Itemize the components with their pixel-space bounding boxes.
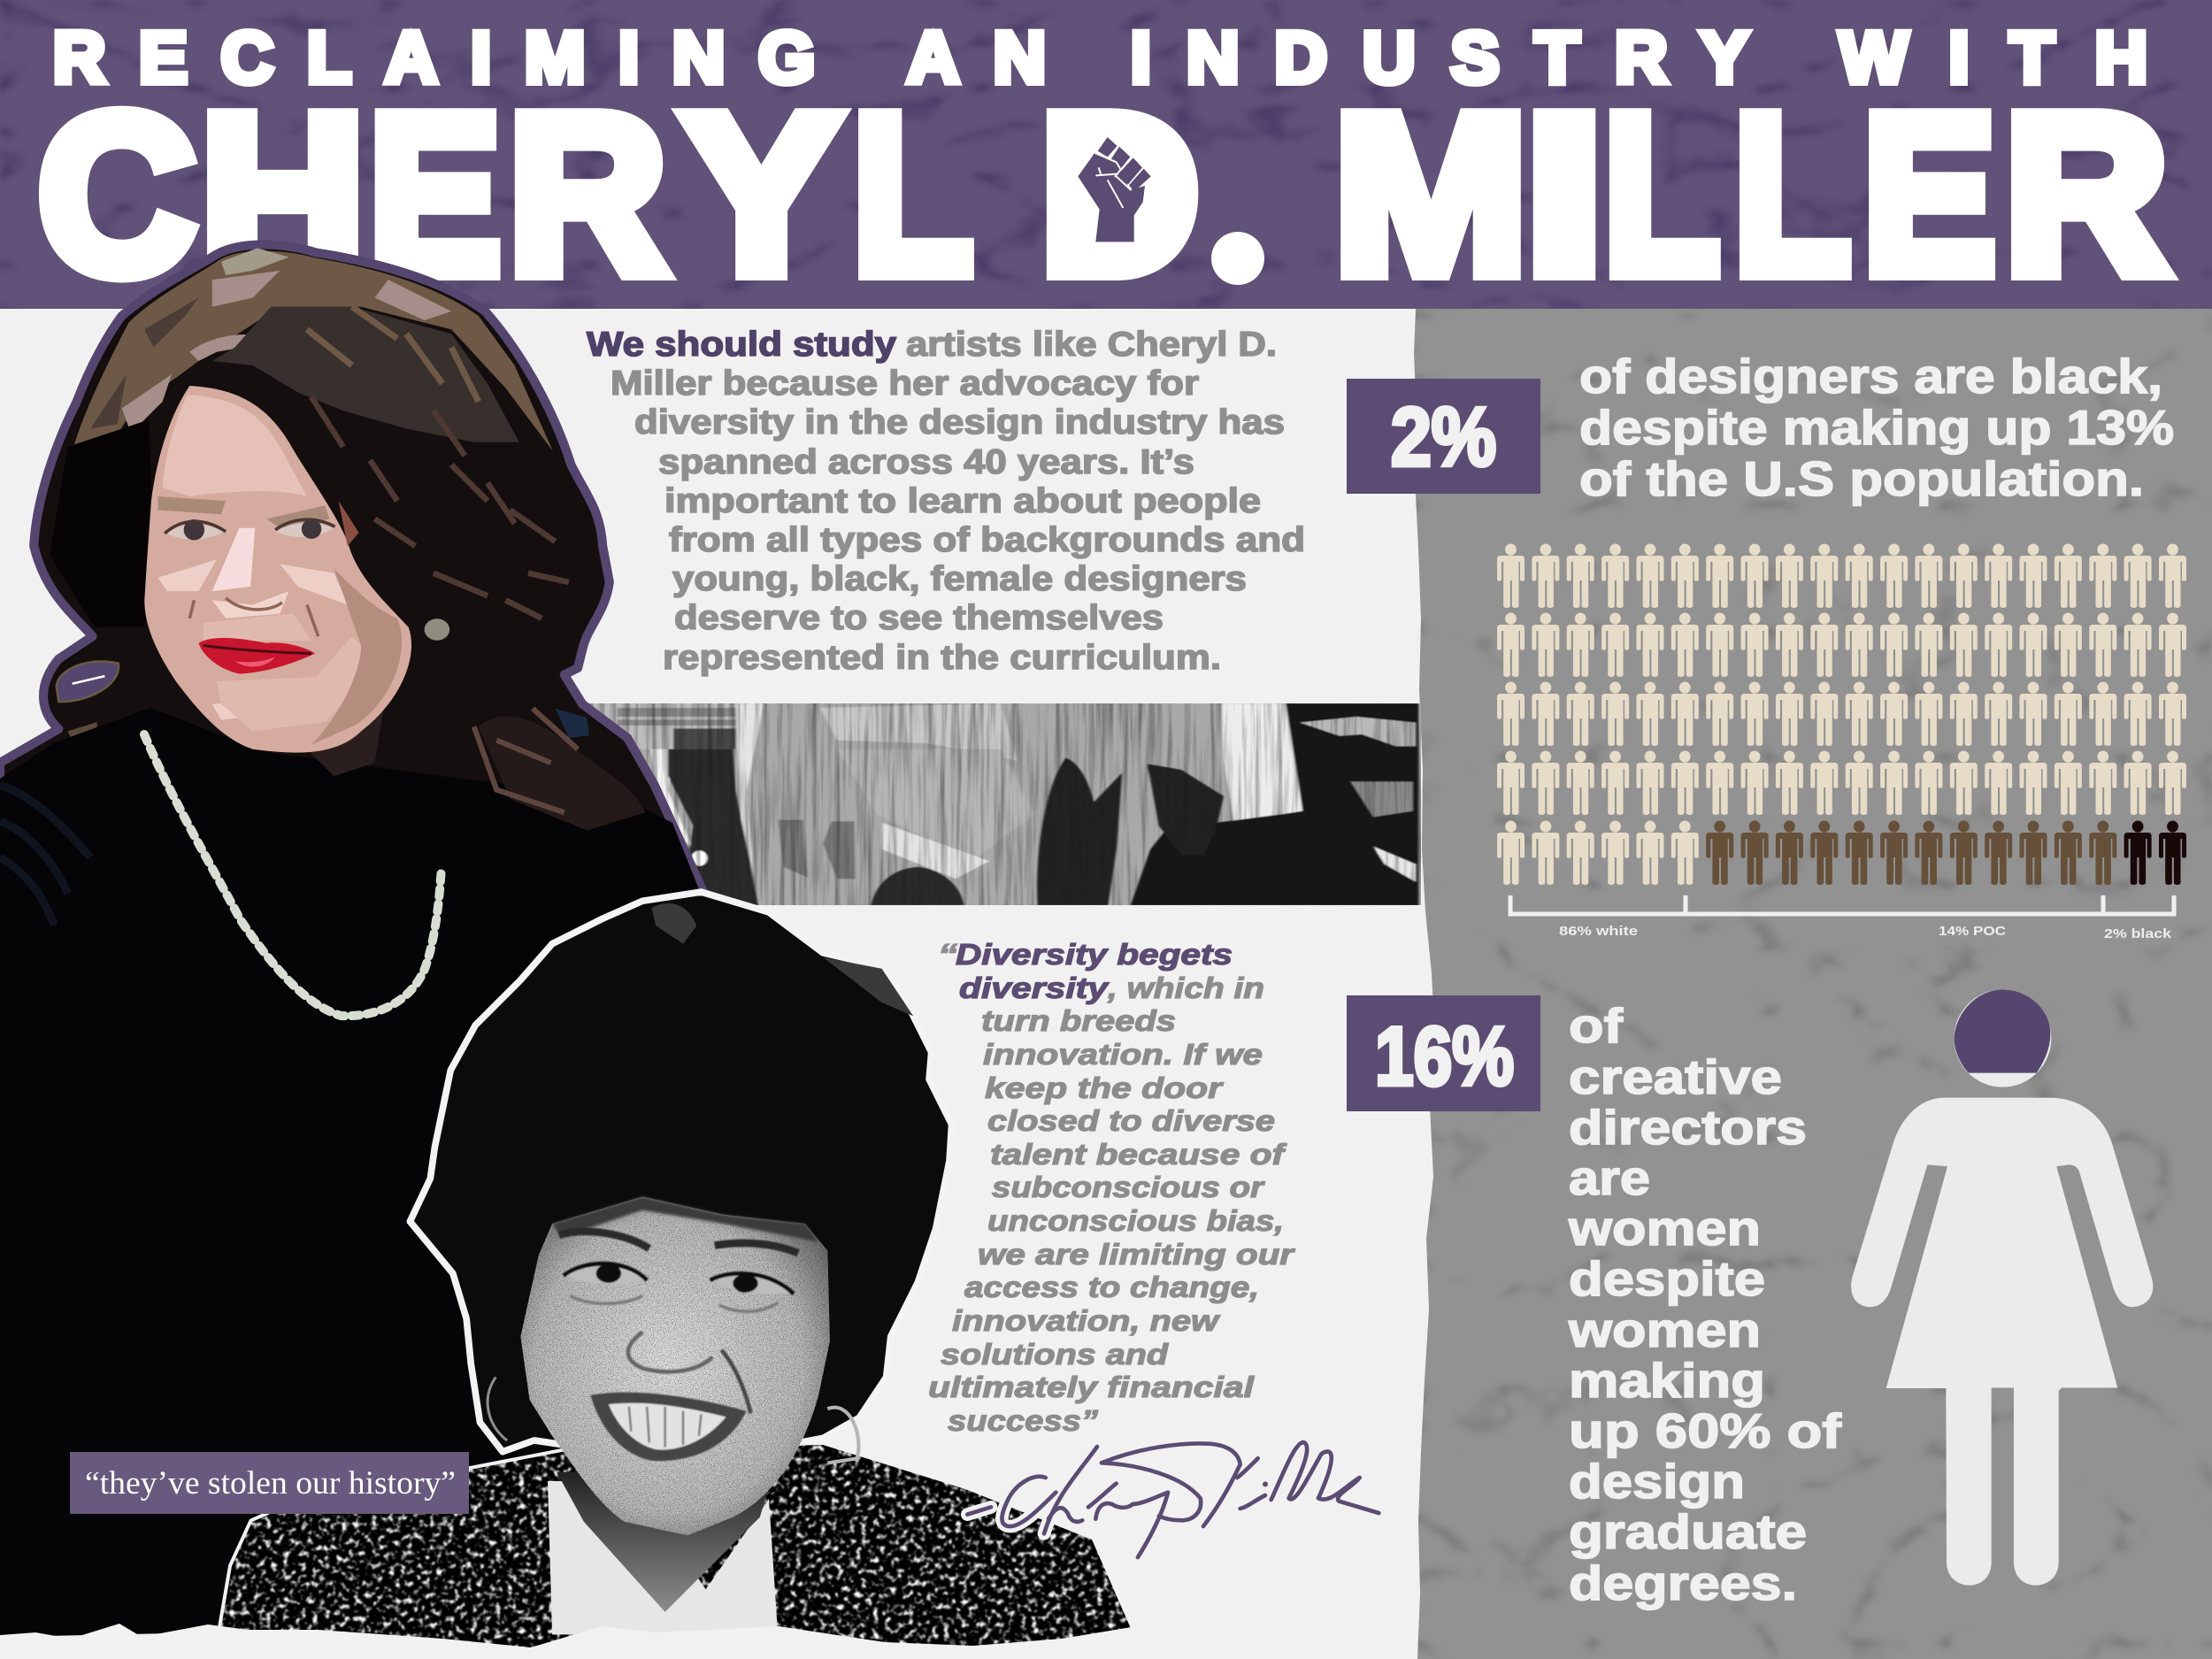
stat box: 2% (1347, 379, 1540, 494)
quote: diversity begets diversity: innovation. If we (983, 1038, 1263, 1071)
title line 2: Cheryl D. Miller: C (39, 68, 195, 319)
stat text: creative directors: design (1569, 1454, 1745, 1509)
neck shadow (307, 709, 384, 776)
stat text: creative directors: women (1568, 1302, 1761, 1357)
signature (967, 1442, 1379, 1557)
quote: diversity begets diversity: ultimately financial (928, 1371, 1255, 1403)
stat text: creative directors: are (1569, 1150, 1650, 1205)
jacket (212, 1445, 1133, 1655)
title line 2: Cheryl D. Miller: . (1220, 148, 1257, 296)
necklace (144, 734, 442, 1016)
black designers (2124, 821, 2186, 885)
portrait: Cheryl D. Miller illustrated (0, 245, 708, 1637)
quote: diversity begets diversity: turn breeds (981, 1004, 1176, 1037)
quote: diversity begets diversity: , which in (1107, 972, 1264, 1004)
title line 2: Cheryl D. Miller: R (509, 68, 666, 319)
stat text: creative directors: directors (1569, 1100, 1807, 1155)
callout: they've stolen our history: “they’ve stolen our history” (85, 1465, 456, 1502)
brows (559, 1232, 798, 1253)
quote: diversity begets diversity: access to change, (964, 1271, 1259, 1303)
people of colour (1706, 821, 2116, 885)
title line 2: Cheryl D. Miller: H (201, 68, 365, 319)
icon: woman figure, head filled 84 percent (1851, 989, 2153, 1586)
title line 1: RECLAIMING (53, 18, 815, 98)
nose (628, 1333, 712, 1371)
text block: why study Cheryl D. Miller: important to learn about people (664, 482, 1261, 520)
title line 1: AN (907, 18, 1046, 98)
stat box: 2%: 2% (1391, 390, 1496, 483)
image strip: abstract black and white paint (566, 703, 1421, 905)
text block: why study Cheryl D. Miller: artists like Cheryl D. (906, 326, 1277, 364)
face (520, 1196, 830, 1535)
stat text: creative directors: up 60% of (1569, 1403, 1842, 1458)
title line 2: Cheryl D. Miller: M (1334, 68, 1527, 319)
hair (410, 892, 952, 1463)
title line 2: Cheryl D. Miller: Y (683, 68, 840, 319)
stat text: creative directors: women (1568, 1201, 1761, 1256)
collar and neck (548, 1481, 778, 1634)
title line 1: INDUSTRY (1131, 18, 1748, 98)
title line 2: Cheryl D. Miller: E (1863, 68, 1995, 319)
hair (0, 245, 704, 952)
quote: diversity begets diversity: keep the door (985, 1071, 1225, 1104)
stat text: designers: of the U.S population. (1579, 451, 2144, 506)
text block: why study Cheryl D. Miller: Miller because her advocacy for (611, 365, 1199, 403)
quote: diversity begets diversity: unconscious bias, (987, 1204, 1284, 1237)
title line 1: WITH (1839, 18, 2147, 98)
quote: diversity begets diversity: talent because of (990, 1138, 1287, 1171)
sleeve folds (0, 786, 90, 926)
stat text: designers: despite making up 13% (1579, 400, 2174, 455)
stat box: 16% (1347, 995, 1540, 1111)
stat text: creative directors: despite (1569, 1251, 1765, 1306)
title line 2: Cheryl D. Miller: I (1525, 68, 1603, 319)
text block: why study Cheryl D. Miller: young, black, female designers (672, 560, 1247, 598)
title line 2: Cheryl D. Miller: D (1041, 68, 1199, 319)
quote: diversity begets diversity: diversity (959, 972, 1110, 1004)
panel: grey torn paper (1414, 309, 2212, 1659)
mouth (590, 1393, 746, 1461)
text block: why study Cheryl D. Miller: diversity in the design industry has (634, 403, 1285, 442)
earrings (827, 1408, 858, 1463)
stat text: creative directors: creative (1569, 1049, 1782, 1104)
text block: why study Cheryl D. Miller: spanned across 40 years. It’s (658, 443, 1194, 481)
stat box: 16%: 16% (1375, 1010, 1514, 1102)
stat text: designers: of designers are black, (1579, 349, 2162, 403)
quote: diversity begets diversity: innovation, new (952, 1304, 1221, 1337)
title line 2: Cheryl D. Miller: L (1734, 68, 1850, 319)
sweater body (0, 708, 708, 1637)
lips (198, 638, 315, 674)
rows of white designers (1497, 543, 2186, 885)
pictogram chart: 100 people (1497, 543, 2186, 885)
title line 2: Cheryl D. Miller (39, 65, 2168, 319)
quote: diversity begets diversity: Diversity begets (956, 938, 1233, 971)
portrait: young Cheryl D. Miller photo (212, 892, 1133, 1655)
title line 2: Cheryl D. Miller: L (1604, 68, 1719, 319)
stat text: creative directors: making (1569, 1353, 1765, 1408)
curl (57, 662, 119, 702)
text block: why study Cheryl D. Miller: deserve to see themselves (674, 599, 1164, 637)
title line 2: Cheryl D. Miller: L (853, 68, 969, 319)
bracket legend: 2% black (2104, 926, 2172, 941)
quote: diversity begets diversity: “ (938, 938, 958, 971)
text block: why study Cheryl D. Miller: from all types of backgrounds and (669, 521, 1305, 559)
bracket legend: 14% POC (1939, 924, 2006, 939)
icon: raised fist (1078, 137, 1151, 242)
callout: they've stolen our history (70, 1452, 469, 1514)
eyes (565, 1267, 791, 1294)
stat text: creative directors: of (1569, 998, 1624, 1053)
lower hair curls (479, 716, 646, 831)
text block: why study Cheryl D. Miller: We should study (587, 326, 896, 364)
bracket legend: 86% white (1559, 924, 1638, 939)
quote: diversity begets diversity: solutions and (941, 1338, 1169, 1371)
face (144, 386, 411, 753)
bracket legend (1510, 895, 2174, 941)
stat text: creative directors: graduate (1569, 1504, 1807, 1559)
quote: diversity begets diversity (928, 938, 1296, 1437)
stat text: designers (1579, 349, 2174, 506)
quote: diversity begets diversity: success” (948, 1404, 1099, 1437)
stat text: creative directors (1568, 998, 1842, 1610)
quote: diversity begets diversity: closed to diverse (987, 1104, 1275, 1137)
quote: diversity begets diversity: we are limiting our (978, 1238, 1296, 1271)
stat text: creative directors: degrees. (1569, 1555, 1797, 1610)
torn paper edge at bottom (0, 1624, 1150, 1659)
title line 2: Cheryl D. Miller: R (2005, 68, 2168, 319)
quote: diversity begets diversity: subconscious or (992, 1171, 1265, 1203)
panel: purple header (0, 0, 2212, 309)
text block: why study Cheryl D. Miller: represented in the curriculum. (663, 639, 1221, 677)
title line 2: Cheryl D. Miller: E (370, 68, 501, 319)
text block: why study Cheryl D. Miller (587, 326, 1305, 677)
